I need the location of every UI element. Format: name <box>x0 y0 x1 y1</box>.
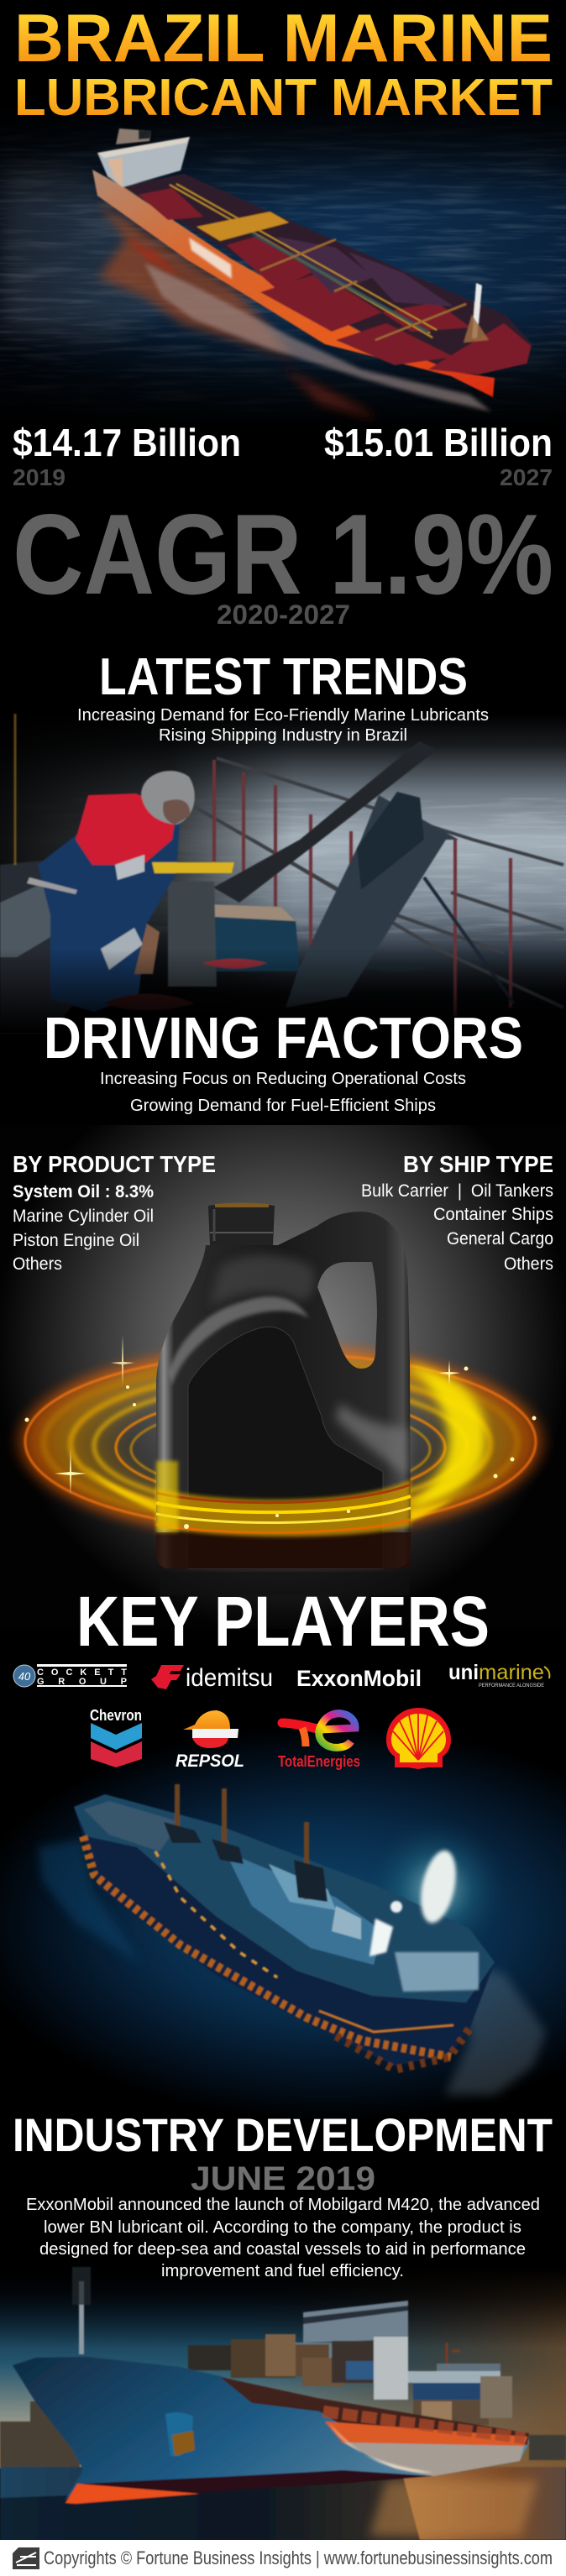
key player logos <box>13 1661 549 1771</box>
by ship type list: Bulk Carrier | Oil Tankers <box>361 1181 553 1201</box>
hero image: bulk carrier at sea <box>0 101 566 441</box>
heading: latest trends: Rising Shipping Industry in Brazil <box>159 726 407 745</box>
industry development paragraph: lower BN lubricant oil. According to the company, the product is <box>44 2218 521 2237</box>
logo: Repsol: REPSOL <box>176 1751 244 1771</box>
sparkles on the ring <box>25 1335 536 1529</box>
image: ship at night <box>0 1725 566 2120</box>
logo: Cockett Group <box>13 1664 127 1687</box>
by product type list <box>13 1151 216 1274</box>
title <box>14 1 553 127</box>
logo: Cockett Group: COCKETT <box>37 1668 127 1678</box>
logo: Idemitsu <box>151 1664 273 1692</box>
logo: ExxonMobil: ExxonMobil <box>296 1666 422 1691</box>
by product type list: Marine Cylinder Oil <box>13 1207 154 1226</box>
by ship type list: General Cargo <box>447 1229 553 1249</box>
market size 2019: $14.17 Billion <box>13 421 241 464</box>
market size 2027: $15.01 Billion <box>324 421 553 464</box>
by product type list: Piston Engine Oil <box>13 1231 139 1250</box>
logo: Unimarine: uni <box>448 1661 479 1684</box>
logo: TotalEnergies <box>278 1714 360 1770</box>
by ship type list: BY SHIP TYPE <box>403 1151 553 1177</box>
by ship type list: Others <box>504 1254 553 1274</box>
industry development paragraph <box>26 2196 540 2280</box>
market size 2019 <box>13 421 241 490</box>
logo: Shell <box>386 1708 451 1769</box>
heading: latest trends: LATEST TRENDS <box>99 648 468 706</box>
front of the golden ring crossing the bottle <box>156 1461 411 1537</box>
image: worker on ship deck <box>0 714 566 1033</box>
heading: industry development <box>13 2108 553 2197</box>
illustration: lubricant bottle with golden ring <box>0 1125 566 1629</box>
logo: Cockett Group: GROUP <box>37 1677 127 1687</box>
footer <box>0 2540 566 2576</box>
market size 2027 <box>324 421 553 490</box>
logo: Chevron <box>90 1707 142 1767</box>
by product type list: BY PRODUCT TYPE <box>13 1151 216 1177</box>
title: BRAZIL MARINE <box>14 1 553 76</box>
industry development paragraph: ExxonMobil announced the launch of Mobilgard M420, the advanced <box>26 2196 540 2214</box>
logo: Repsol <box>176 1710 244 1771</box>
heading: key players: KEY PLAYERS <box>76 1582 490 1661</box>
logo: Unimarine: marine <box>479 1661 544 1684</box>
market size 2027: 2027 <box>500 464 553 490</box>
heading: industry development: JUNE 2019 <box>191 2160 375 2197</box>
logo: TotalEnergies: TotalEnergies <box>278 1753 360 1770</box>
market size 2019: 2019 <box>13 464 66 490</box>
by product type list: System Oil : 8.3% <box>13 1182 154 1202</box>
heading: latest trends: Increasing Demand for Eco-Friendly Marine Lubricants <box>77 706 489 725</box>
industry development paragraph: improvement and fuel efficiency. <box>161 2262 404 2280</box>
CAGR: 2020-2027 <box>217 599 350 630</box>
logo: Cockett Group: 40 <box>18 1670 31 1683</box>
by product type list: Others <box>13 1254 62 1274</box>
logo: Unimarine: PERFORMANCE ALONGSIDE <box>479 1683 544 1689</box>
image: container ship <box>0 2267 566 2540</box>
heading: driving factors: Growing Demand for Fuel-Efficient Ships <box>130 1097 436 1115</box>
heading: latest trends <box>77 648 489 745</box>
heading: driving factors: Increasing Focus on Reducing Operational Costs <box>100 1070 466 1088</box>
logo: Idemitsu: idemitsu <box>186 1664 273 1692</box>
logo: Chevron: Chevron <box>90 1707 142 1724</box>
industry development paragraph: designed for deep-sea and coastal vessels to aid in performance <box>39 2240 526 2259</box>
heading: driving factors <box>44 1005 523 1115</box>
by ship type list: Container Ships <box>433 1205 553 1224</box>
logo: Unimarine <box>448 1661 549 1689</box>
title: LUBRICANT MARKET <box>14 69 553 127</box>
by ship type list <box>361 1151 553 1274</box>
icon: Fortune Business Insights logo <box>13 2547 39 2569</box>
